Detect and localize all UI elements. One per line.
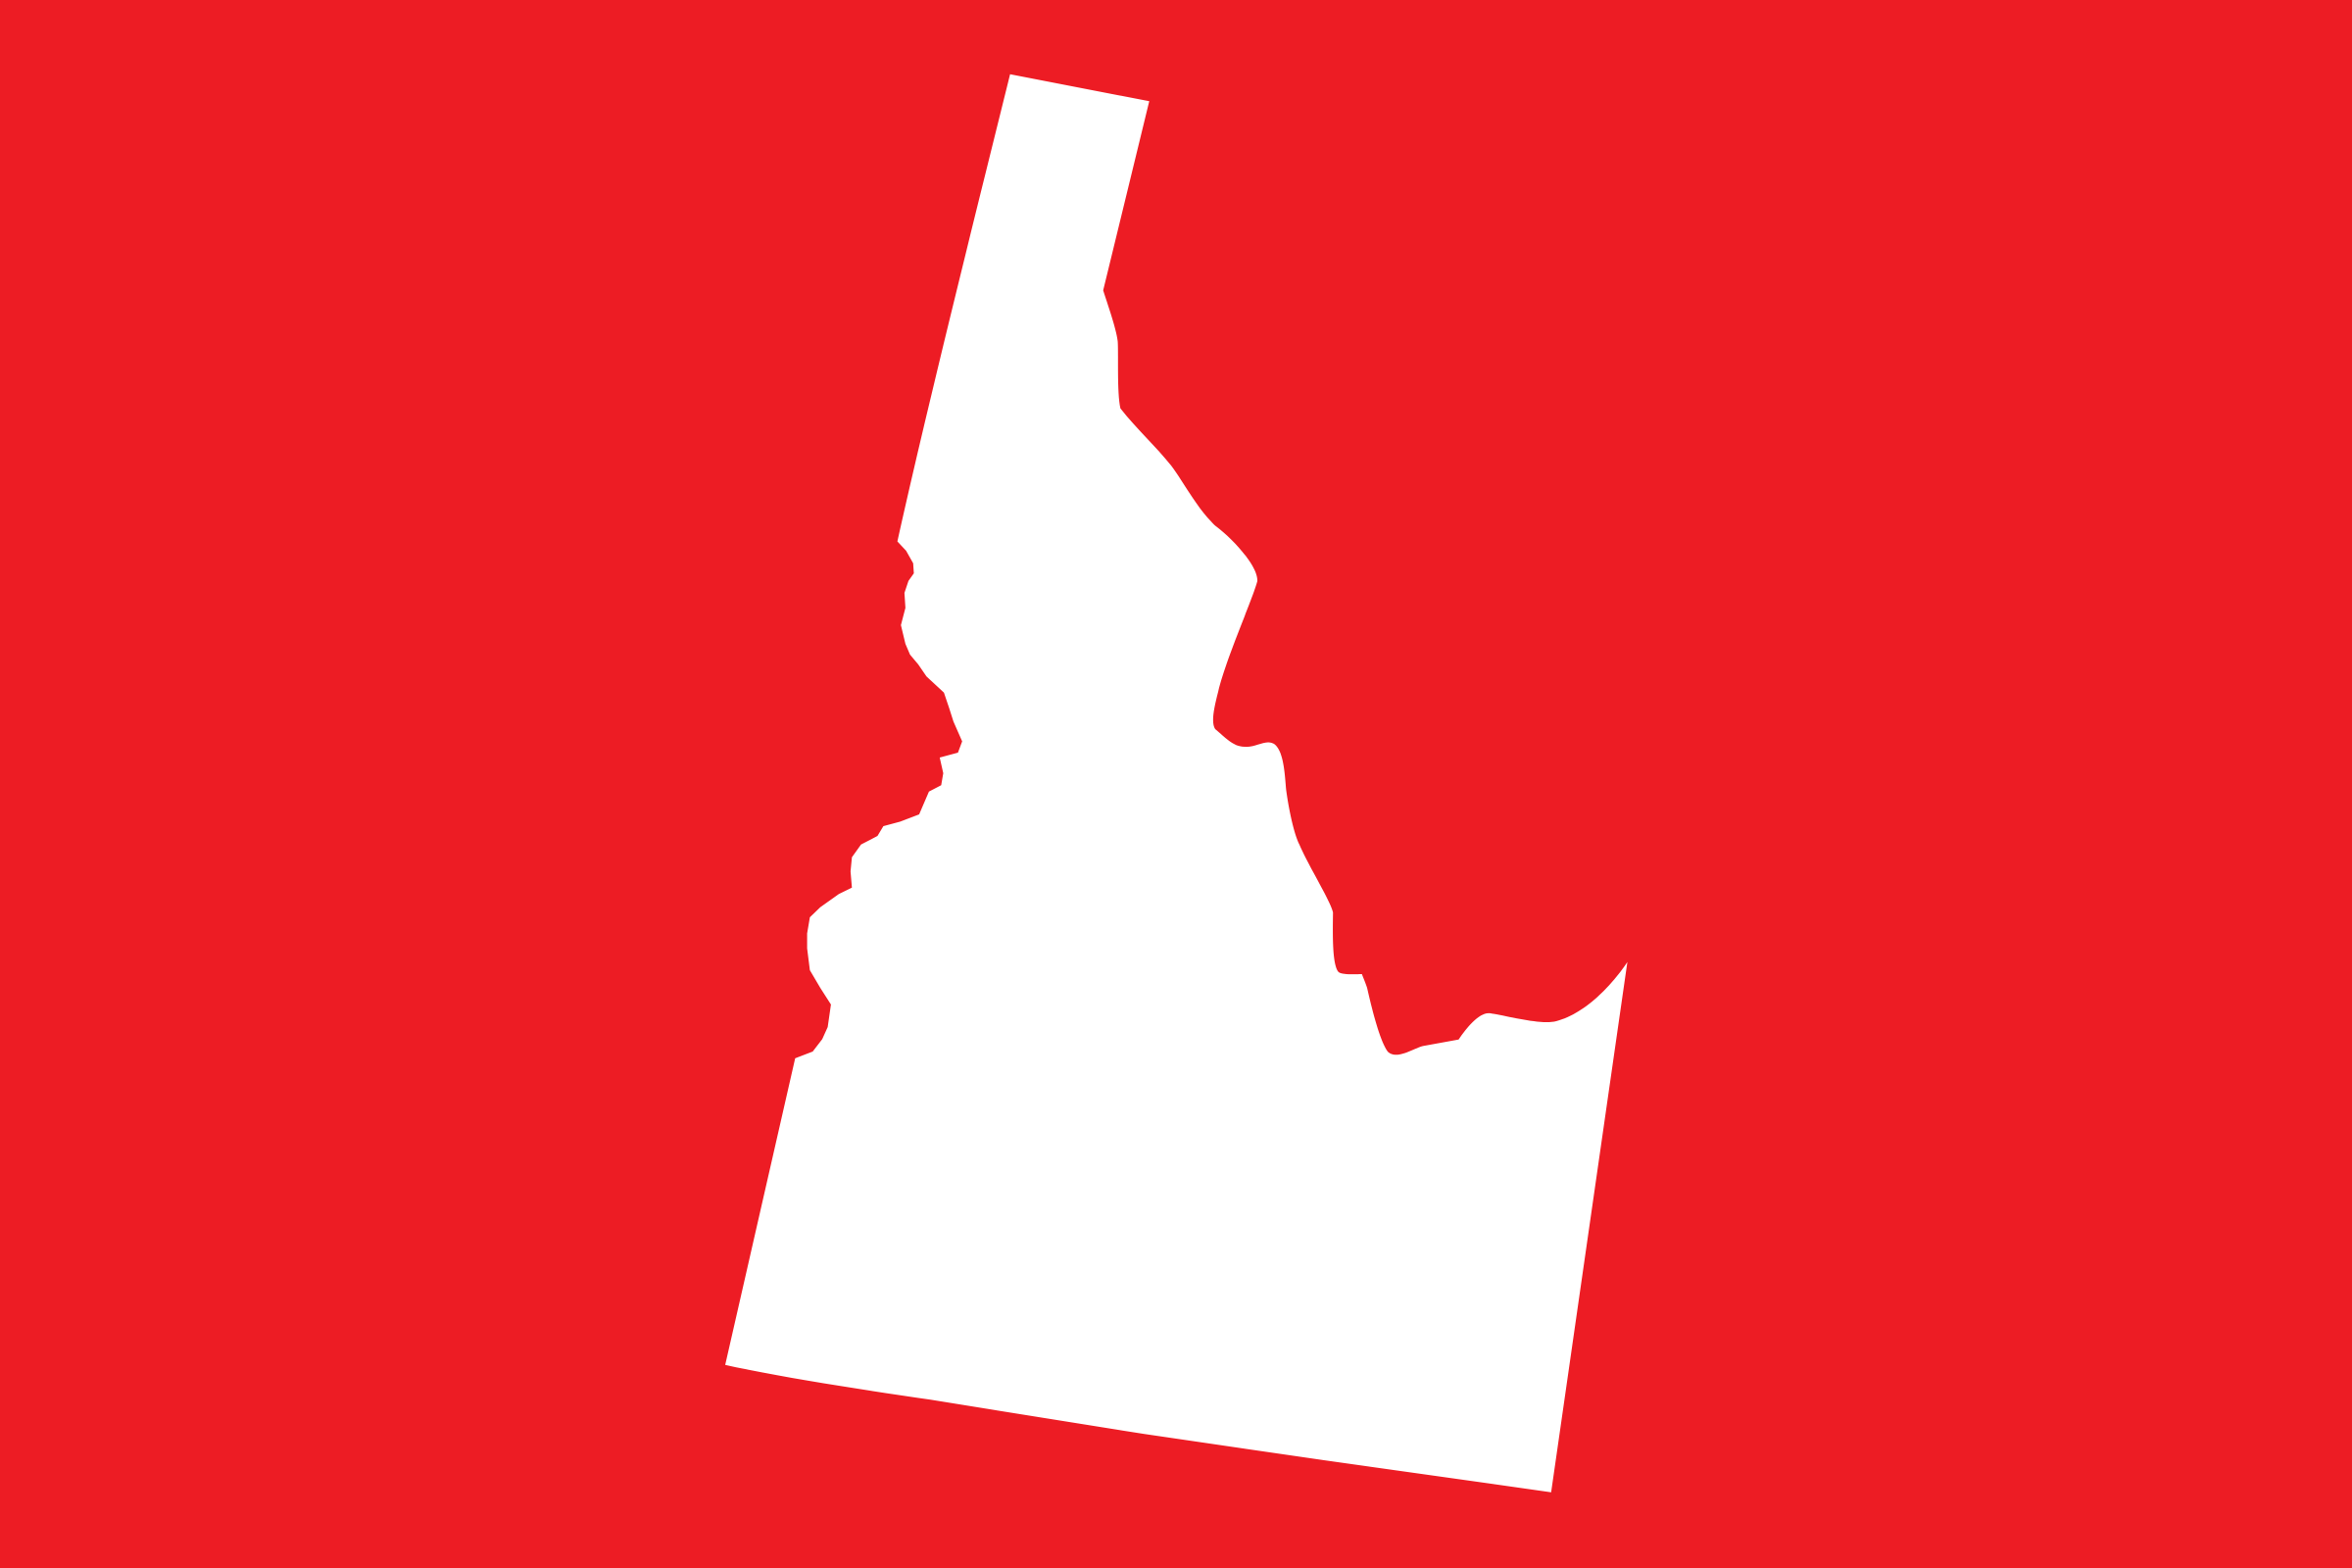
icon: white silhouette of Idaho bbox=[725, 74, 1628, 1493]
